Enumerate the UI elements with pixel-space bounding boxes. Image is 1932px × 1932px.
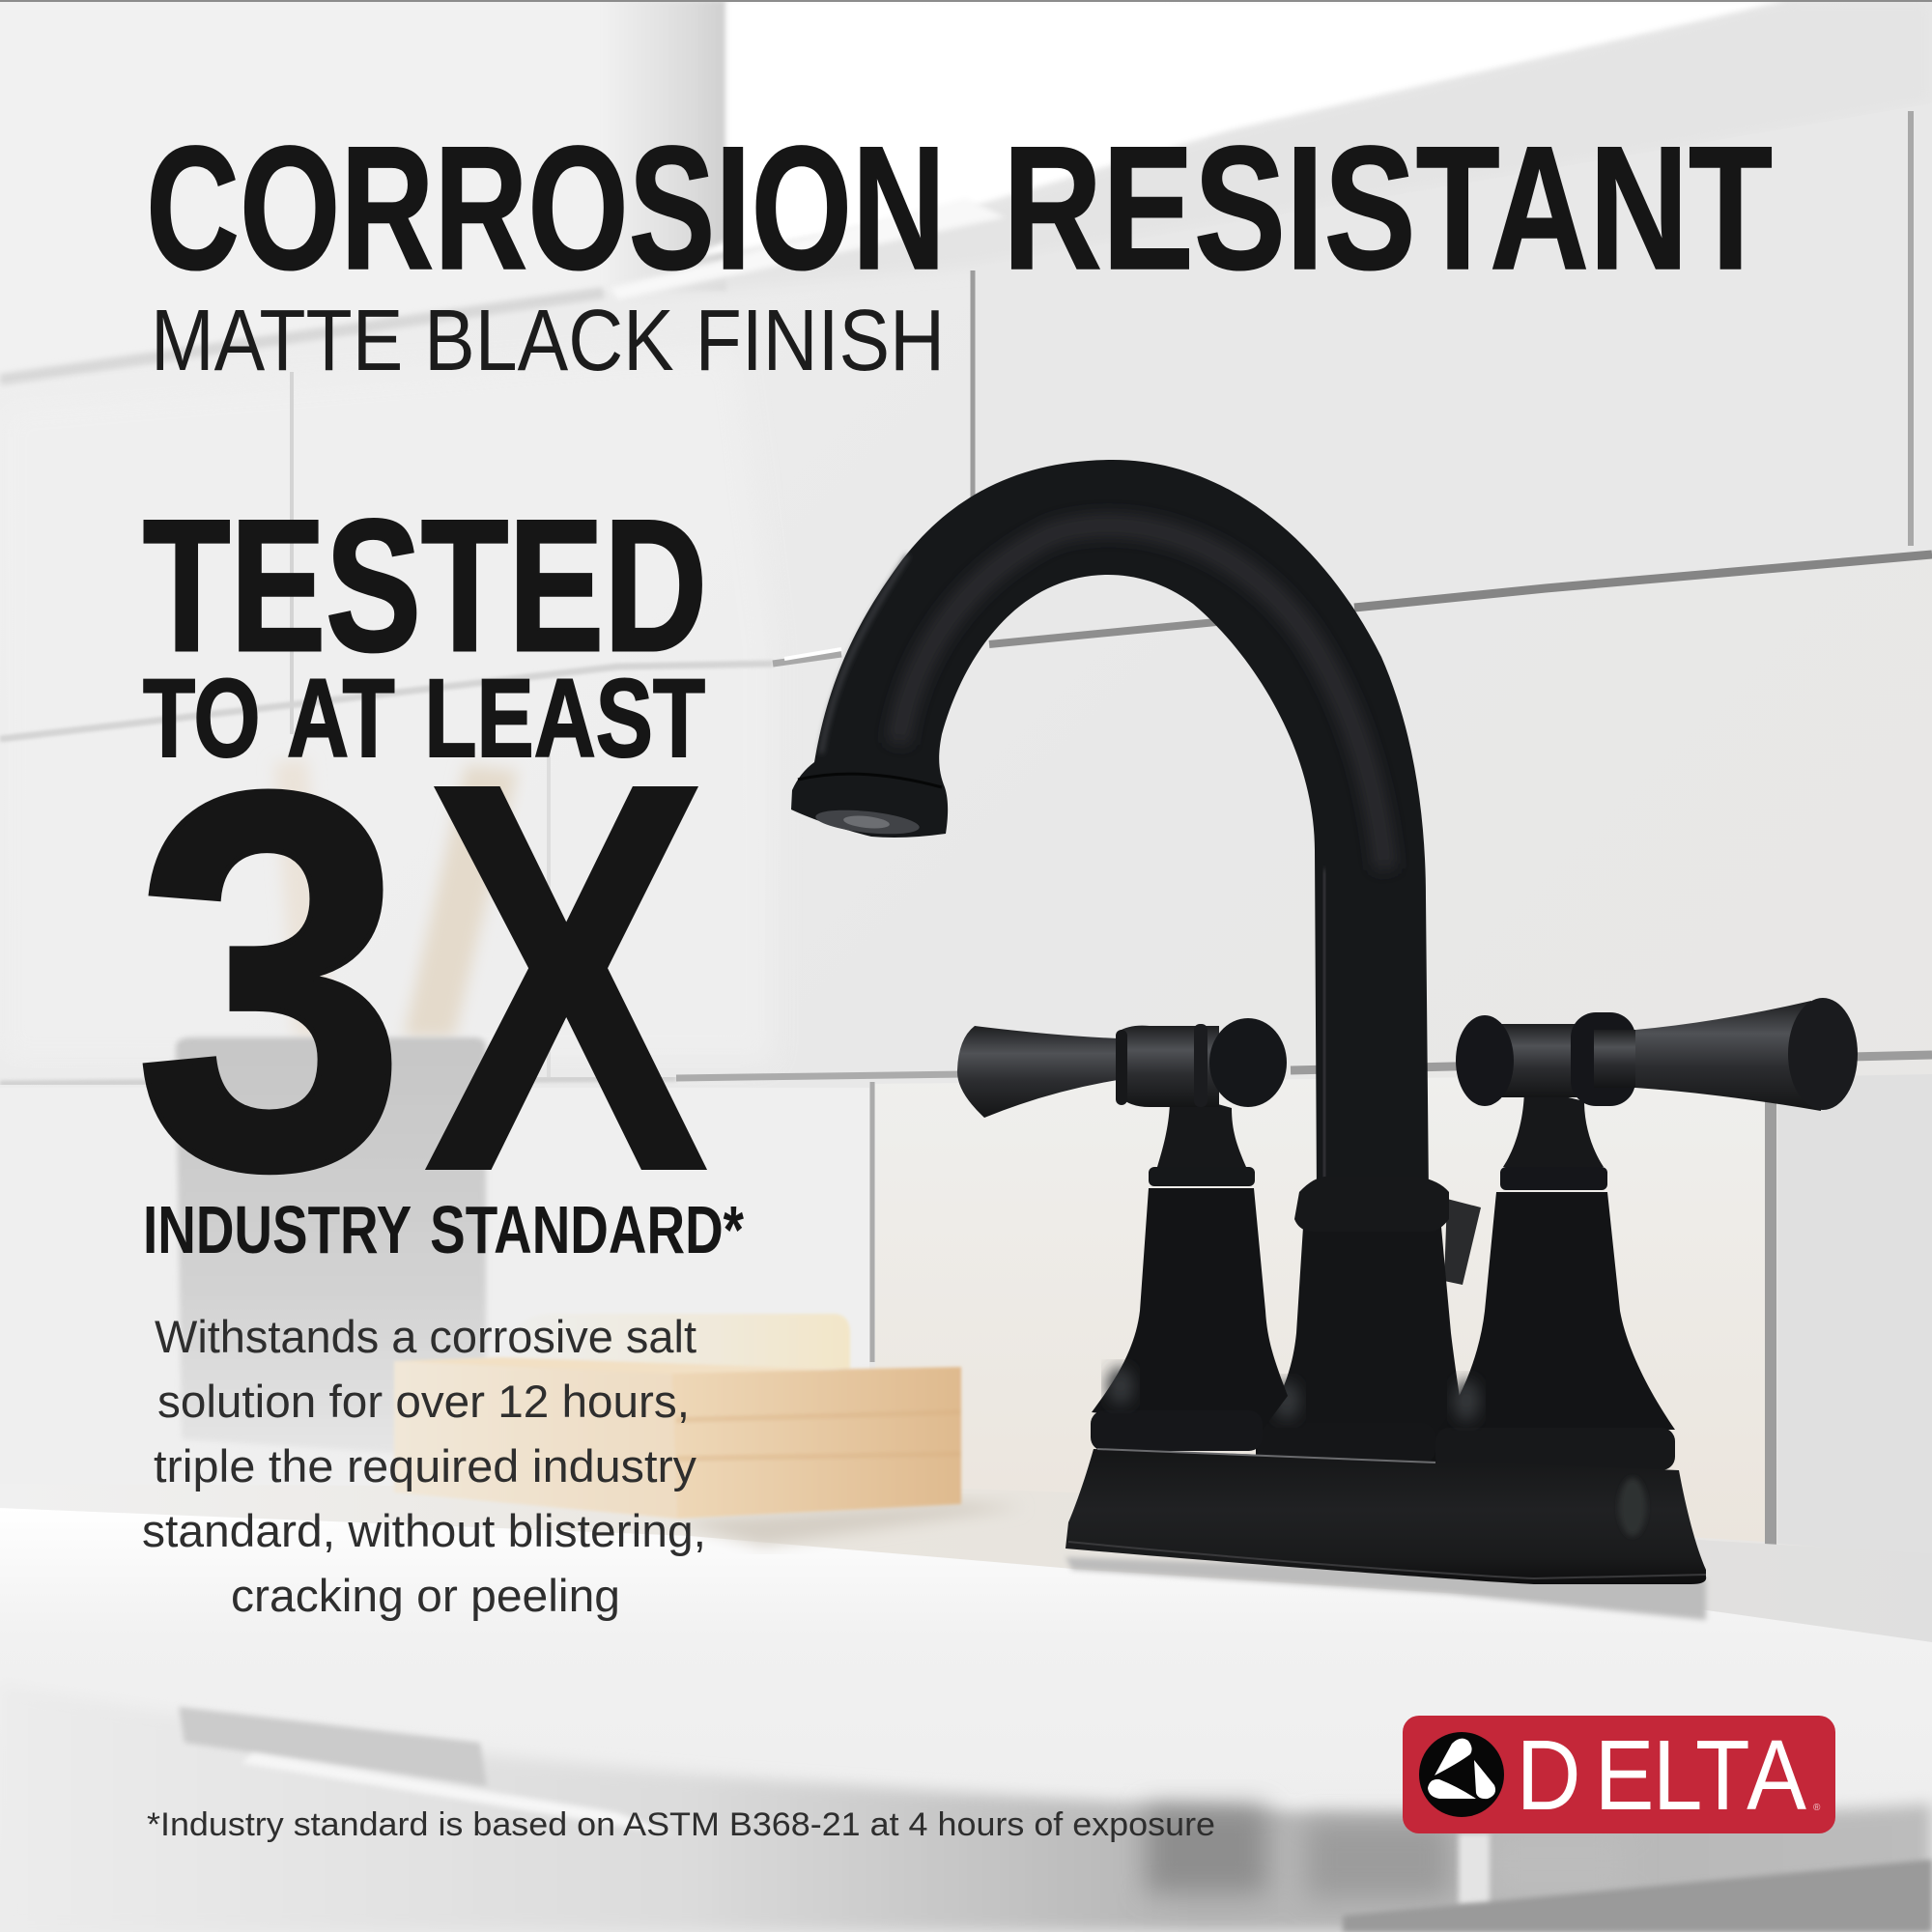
blurred vertical tile edge — [604, 0, 726, 290]
light strip on counter — [242, 1753, 676, 1835]
soft lighter wall left — [0, 348, 773, 1063]
counter bottom shadow — [0, 1683, 1932, 1932]
right handle — [1435, 998, 1858, 1470]
shelf highlight — [611, 198, 1005, 299]
faucet base reflection — [1065, 1557, 1706, 1620]
counter dark corner — [1343, 1860, 1932, 1932]
3x: figure three: 3 — [134, 681, 407, 1280]
to at least: TO AT LEAST — [143, 657, 705, 781]
industry standard: INDUSTRY STANDARD* — [143, 1192, 745, 1267]
description text — [142, 1311, 706, 1621]
registered mark: ® — [1813, 1803, 1821, 1813]
tested: TESTED — [143, 481, 707, 691]
icon: delta mark — [1419, 1732, 1504, 1817]
right lever — [1635, 1001, 1821, 1111]
title — [146, 109, 1773, 389]
heading: corrosion: CORROSION — [146, 109, 946, 306]
soap bar — [511, 1314, 850, 1372]
grey shelf band — [616, 0, 1932, 298]
subheading: matte black finish: MATTE BLACK FINISH — [151, 293, 945, 389]
left upper tile shadow line — [0, 293, 604, 380]
nozzle collar line — [798, 774, 942, 787]
bright upper wall band — [676, 0, 1787, 261]
cup — [176, 1037, 486, 1459]
faucet reflections — [1146, 1806, 1626, 1898]
right upper tile — [973, 103, 1932, 647]
soap dish shadow — [676, 1502, 1024, 1546]
delta wordmark: DELTA — [1517, 1719, 1807, 1831]
soap dish — [394, 1357, 961, 1519]
claim block — [134, 481, 745, 1289]
spout sheen — [898, 526, 1385, 869]
counter front face — [0, 1508, 1932, 1932]
pop-up lever — [1442, 1199, 1481, 1339]
aerator — [814, 806, 921, 838]
upper left tile — [0, 0, 609, 379]
spout — [791, 460, 1429, 1198]
delta logo — [1403, 1716, 1835, 1833]
lower warm tile — [875, 1074, 1765, 1542]
counter top surface — [0, 1484, 1932, 1642]
description text: standard, without blistering, — [142, 1505, 706, 1556]
icon: toothbrush handles — [274, 758, 518, 1037]
center column base — [1256, 1177, 1468, 1473]
description text: Withstands a corrosive salt — [155, 1311, 696, 1362]
deck plate — [1065, 1449, 1706, 1584]
left lever — [957, 1026, 1118, 1118]
faucet — [791, 460, 1858, 1584]
lower right tile — [1777, 1074, 1932, 1555]
lower left tile — [0, 1088, 869, 1493]
spout rim highlight — [821, 555, 908, 753]
description text: triple the required industry — [154, 1440, 697, 1492]
description text: solution for over 12 hours, — [157, 1376, 690, 1427]
footnote: *Industry standard is based on ASTM B368-21 at 4 hours of exposure — [147, 1806, 1215, 1843]
description text: cracking or peeling — [231, 1570, 620, 1621]
wall tile grout lines — [0, 111, 1932, 1084]
3x: letter x: X — [421, 667, 713, 1289]
top edge line — [0, 0, 1932, 2]
column sheen — [1323, 869, 1325, 1188]
left handle — [957, 1018, 1288, 1451]
reflection light strip — [1459, 1833, 1490, 1906]
faint counter reflection patch — [179, 1707, 487, 1786]
